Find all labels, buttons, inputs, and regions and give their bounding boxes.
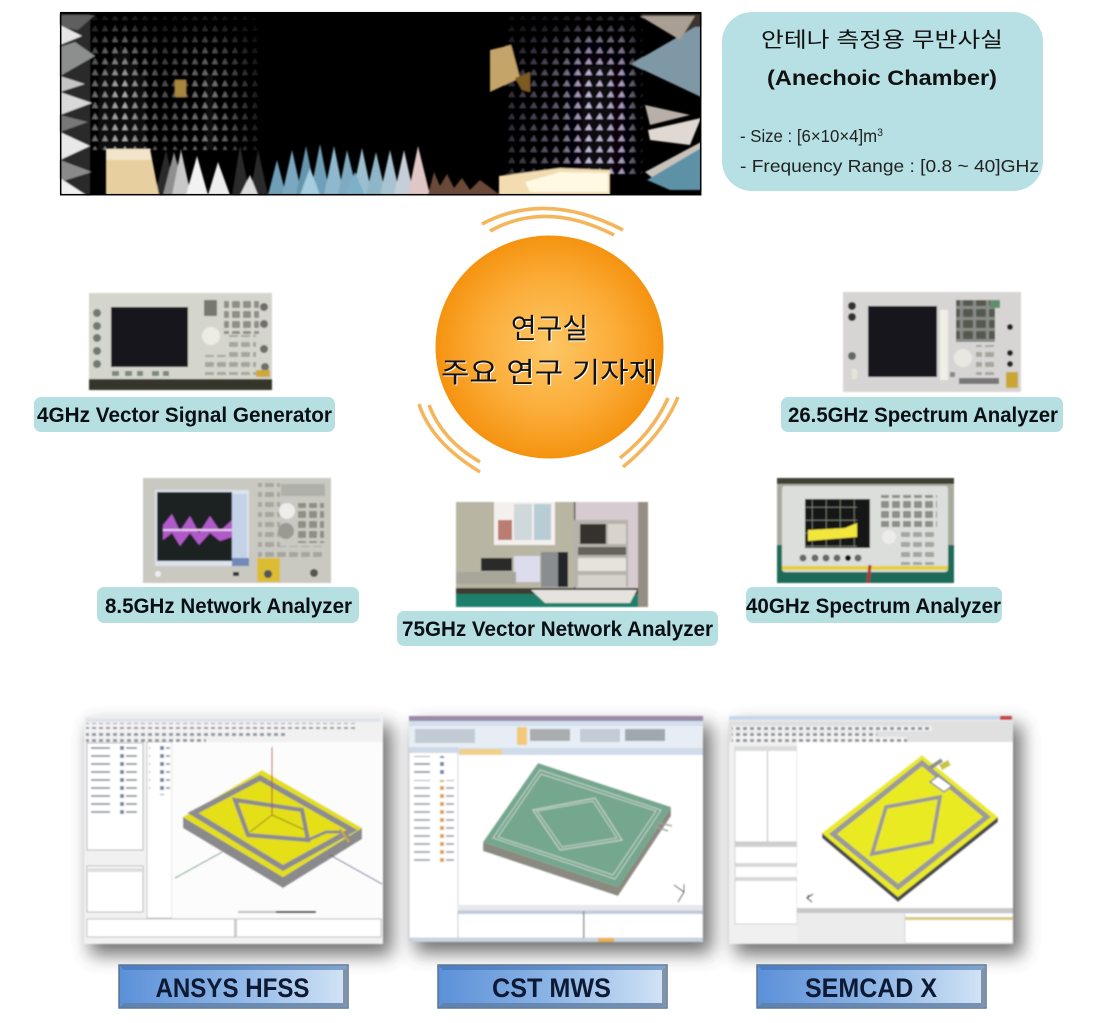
antenna model	[183, 770, 362, 888]
left wall absorbers	[90, 16, 262, 150]
label	[746, 587, 1002, 623]
software: SEMCAD X	[729, 716, 1022, 1008]
axes triad	[674, 884, 684, 902]
software label	[757, 965, 986, 1008]
software label: CST MWS	[492, 973, 611, 1003]
label: 4GHz Vector Signal Generator	[37, 404, 332, 427]
software label	[119, 965, 348, 1008]
equipment: 4GHz vector signal generator	[34, 293, 335, 432]
label: 40GHz Spectrum Analyzer	[746, 595, 1001, 618]
small antenna left	[175, 80, 186, 97]
arc pair: top	[482, 208, 623, 235]
software label: SEMCAD X	[805, 973, 937, 1003]
circle title: 연구실	[512, 314, 589, 345]
label	[397, 611, 718, 646]
floor cones: blue	[268, 144, 430, 195]
spec: size: 3	[877, 127, 883, 139]
software: ANSYS HFSS	[84, 716, 392, 1008]
circle title: 연구실	[511, 313, 588, 344]
label: 8.5GHz Network Analyzer	[105, 595, 352, 618]
horn antenna right	[490, 45, 530, 92]
axes triad	[807, 894, 813, 902]
circle title: 주요 연구 기자재	[442, 358, 658, 389]
arc pair: bottom left	[419, 404, 480, 472]
software: CST MWS	[409, 716, 712, 1008]
label	[34, 397, 335, 432]
screenshot: CST	[409, 716, 703, 942]
heading: Korean chamber title: 안테나 측정용 무반사실	[761, 29, 1003, 52]
foam box right	[499, 168, 610, 195]
software label	[438, 965, 667, 1008]
photo: spectrum analyzer	[777, 478, 954, 583]
photo: anechoic chamber	[60, 12, 701, 195]
photo: network analyzer	[143, 478, 331, 583]
floor cones: brown	[428, 172, 500, 195]
right side cones	[631, 14, 701, 190]
window shadow	[415, 725, 712, 953]
equipment: 75GHz vector network analyzer	[397, 502, 718, 646]
label	[97, 587, 359, 623]
heading: English chamber title: (Anechoic Chamber)	[767, 66, 997, 90]
arc pair: bottom right	[620, 397, 678, 467]
axes	[175, 747, 382, 884]
equipment: 26.5GHz spectrum analyzer	[781, 292, 1063, 432]
screenshot: SEMCAD	[729, 716, 1013, 944]
spec: frequency range: - Frequency Range : [0.8 ~ 40]GHz	[740, 156, 1039, 176]
software label: ANSYS HFSS	[156, 973, 310, 1003]
photo: lab bench	[456, 502, 648, 607]
equipment: 40GHz spectrum analyzer	[746, 478, 1002, 623]
left side cones	[60, 14, 95, 195]
photo: spectrum analyzer	[843, 292, 1021, 392]
circle title: 주요 연구 기자재	[441, 357, 657, 388]
circle title	[441, 313, 658, 389]
equipment: 8.5GHz network analyzer	[97, 478, 359, 623]
center orange circle with arcs	[419, 208, 678, 472]
label	[781, 397, 1063, 432]
window shadow	[735, 725, 1022, 955]
label: 75GHz Vector Network Analyzer	[402, 618, 713, 641]
antenna model	[483, 763, 672, 896]
floor cones: white	[163, 150, 258, 195]
right wall absorbers	[505, 16, 643, 174]
spec: size: - Size : [6×10×4]m	[740, 126, 883, 146]
floor cones: dark	[155, 146, 268, 195]
label: 26.5GHz Spectrum Analyzer	[788, 404, 1058, 427]
panel: chamber specifications	[722, 12, 1043, 191]
screenshot: HFSS	[84, 716, 383, 944]
antenna model	[822, 755, 998, 902]
photo: signal generator	[89, 293, 272, 390]
orange circle	[436, 236, 664, 458]
foam box left	[106, 149, 159, 195]
window shadow	[90, 725, 392, 955]
